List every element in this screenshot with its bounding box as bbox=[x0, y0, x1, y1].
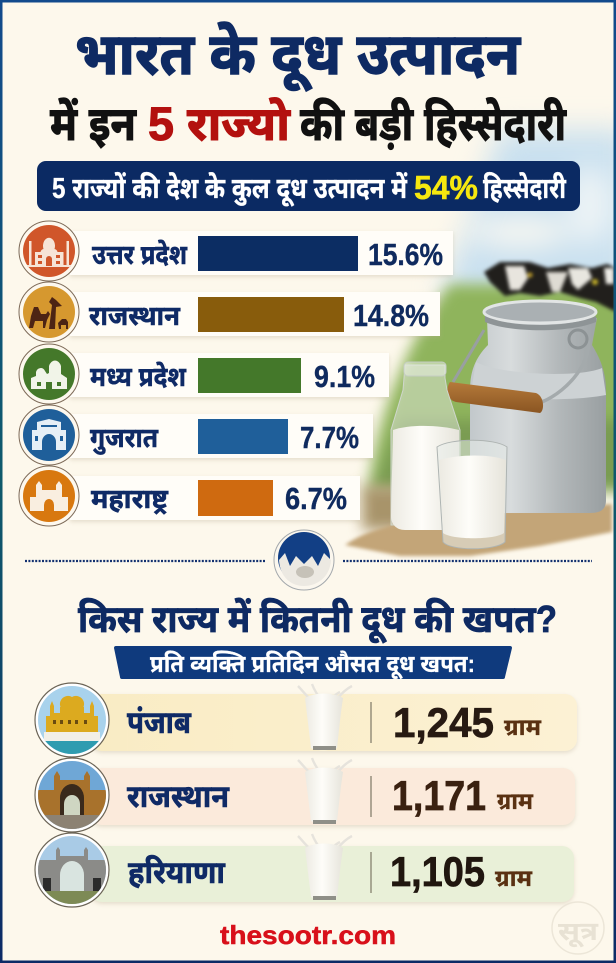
state row: Uttar Pradesh bbox=[19, 221, 453, 281]
title line 2: की बड़ी हिस्सेदारी bbox=[300, 97, 567, 150]
state row: Maharashtra: 6.7% bbox=[285, 481, 347, 516]
section heading: किस राज्य में कितनी दूध की खपत? bbox=[78, 597, 557, 644]
top banner: 54 percent share: 54% bbox=[414, 169, 478, 206]
icon: milk crown bbox=[274, 530, 334, 590]
hero photo: dairy farm scene bbox=[345, 130, 616, 556]
sky bbox=[440, 130, 616, 300]
state row: Maharashtra: महाराष्ट्र bbox=[91, 484, 169, 515]
top banner: 54 percent share bbox=[37, 161, 580, 211]
consumption row: Punjab: 1,245 bbox=[393, 699, 494, 746]
title line 1: भारत के दूध उत्पादन bbox=[75, 22, 521, 92]
table bbox=[362, 486, 470, 530]
consumption row: Haryana bbox=[90, 834, 574, 902]
state row: Rajasthan: 14.8% bbox=[353, 298, 429, 333]
title line 2: 5 राज्यो bbox=[148, 97, 291, 150]
state row: Gujarat: गुजरात bbox=[90, 423, 159, 454]
icon: Taj Mahal bbox=[19, 221, 79, 281]
website footer: thesootr.com bbox=[220, 920, 396, 950]
milk bottle bbox=[391, 362, 460, 530]
consumption row: Punjab: ग्राम bbox=[504, 714, 542, 740]
field bbox=[368, 284, 616, 492]
state row: Maharashtra bbox=[19, 466, 360, 526]
icon: fort gate bbox=[19, 466, 79, 526]
subheading ribbon bbox=[114, 646, 512, 680]
icon: gateway bbox=[19, 405, 79, 465]
icon: domed monument bbox=[19, 344, 79, 404]
milk glass bbox=[437, 440, 507, 549]
state row: Madhya Pradesh: 9.1% bbox=[314, 359, 375, 394]
photo: Haryana gate bbox=[35, 833, 109, 907]
subheading ribbon: प्रति व्यक्ति प्रतिदिन औसत दूध खपत: bbox=[150, 650, 475, 680]
consumption row: Punjab bbox=[90, 684, 577, 751]
top banner: 54 percent share: 5 राज्यों की देश के कुल दूध उत्पादन में bbox=[52, 171, 408, 207]
state row: Uttar Pradesh: उत्तर प्रदेश bbox=[92, 239, 187, 270]
burlap cloth bbox=[345, 504, 612, 556]
top banner: 54 percent share: हिस्सेदारी bbox=[483, 171, 566, 205]
watermark logo: सूत्र bbox=[558, 916, 599, 948]
divider with milk crown icon bbox=[25, 530, 592, 590]
state row: Gujarat bbox=[19, 405, 373, 465]
state row: Madhya Pradesh: मध्य प्रदेश bbox=[90, 361, 186, 392]
icon: camel rider bbox=[19, 282, 79, 342]
title line 2 bbox=[50, 97, 567, 150]
consumption row: Rajasthan: ग्राम bbox=[497, 788, 534, 814]
state row: Rajasthan: राजस्थान bbox=[89, 301, 181, 331]
title line 2: में इन bbox=[50, 97, 137, 150]
consumption row: Haryana: 1,105 bbox=[390, 848, 485, 895]
state row: Gujarat: 7.7% bbox=[300, 420, 359, 455]
cows bbox=[484, 262, 616, 312]
photo: Rajasthan gate bbox=[35, 758, 109, 832]
consumption row: Rajasthan: 1,171 bbox=[392, 772, 486, 819]
consumption row: Haryana: ग्राम bbox=[495, 865, 533, 891]
consumption row: Rajasthan bbox=[90, 758, 575, 825]
photo: Golden Temple bbox=[35, 683, 109, 757]
consumption row: Rajasthan: राजस्थान bbox=[127, 779, 230, 814]
watermark logo bbox=[552, 902, 604, 954]
consumption row: Punjab: पंजाब bbox=[127, 705, 192, 740]
icon: milk glass splash bbox=[298, 834, 352, 900]
milk can bbox=[448, 301, 606, 513]
state row: Uttar Pradesh: 15.6% bbox=[368, 237, 443, 272]
icon: milk glass splash bbox=[298, 684, 352, 750]
consumption row: Haryana: हरियाणा bbox=[128, 855, 226, 890]
state row: Madhya Pradesh bbox=[19, 344, 389, 404]
state row: Rajasthan bbox=[19, 282, 440, 342]
icon: milk glass splash bbox=[298, 758, 352, 824]
